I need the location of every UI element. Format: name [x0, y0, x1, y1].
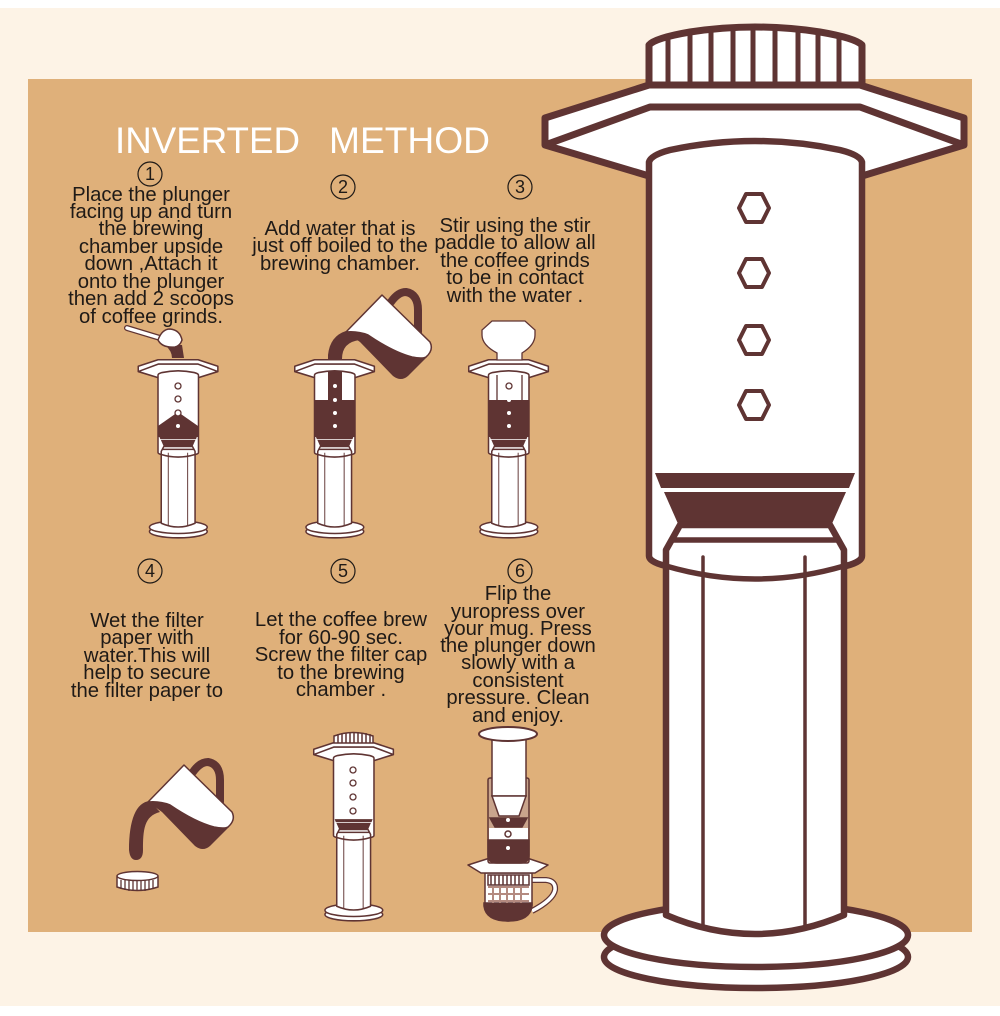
step 3 number: [508, 175, 532, 199]
step 6 text: pressure. Clean: [446, 687, 590, 709]
step 6 text: your mug. Press: [444, 618, 592, 640]
panel: tan background: [28, 79, 972, 932]
step 5 illustration: press with filter cap: [314, 732, 393, 921]
step 5 text: [255, 609, 427, 701]
step 2 text: [251, 218, 428, 275]
step 6 text: [440, 583, 596, 727]
brewing chamber: [649, 141, 862, 566]
step 4 text: [71, 610, 223, 702]
step 1 text: of coffee grinds.: [79, 306, 223, 328]
step 1 text: onto the plunger: [78, 271, 225, 293]
step 1 text: Place the plunger: [72, 184, 230, 206]
step 1 text: facing up and turn: [70, 201, 232, 223]
step 2 number: 2: [338, 177, 348, 197]
step 6 text: slowly with a: [461, 652, 576, 674]
title: [115, 120, 490, 161]
step 4 illustration: jug pouring on filter cap: [117, 762, 233, 891]
step 2 text: brewing chamber.: [260, 253, 420, 275]
step 3 number: 3: [515, 177, 525, 197]
step 3 text: Stir using the stir: [439, 215, 591, 237]
step 6 text: yuropress over: [451, 601, 585, 623]
hexagonal markers: [739, 194, 769, 419]
step 3 text: paddle to allow all: [434, 232, 596, 254]
step 6 text: consistent: [472, 670, 564, 692]
step 6 illustration: press flipped over mug: [468, 727, 555, 921]
step 2 illustration: water poured into press: [295, 292, 431, 538]
flange inner line: [545, 107, 964, 145]
step 3 text: with the water .: [446, 285, 583, 307]
step 2 text: just off boiled to the: [251, 235, 428, 257]
step 1 illustration: press with coffee grinds and scoop: [127, 328, 218, 538]
step 4 text: water.This will: [83, 645, 210, 667]
step 5 text: chamber .: [296, 679, 386, 701]
step 5 text: Let the coffee brew: [255, 609, 427, 631]
lower tube: [666, 525, 844, 934]
step 1 text: chamber upside: [79, 236, 223, 258]
title: INVERTED: [115, 120, 300, 161]
base: [604, 903, 908, 988]
step 4 number: 4: [145, 561, 155, 581]
step 1 text: [68, 184, 234, 328]
step 6 text: Flip the: [485, 583, 551, 605]
tube rods: [703, 557, 805, 926]
tube collar: [649, 540, 862, 579]
flange: [545, 85, 964, 176]
step 3 text: [434, 215, 596, 307]
step 3 text: the coffee grinds: [440, 250, 590, 272]
step 6 number: 6: [515, 561, 525, 581]
step 4 number: [138, 559, 162, 583]
step 5 number: [331, 559, 355, 583]
step 4 text: help to secure: [83, 662, 211, 684]
step 5 text: Screw the filter cap: [255, 644, 427, 666]
plunger cap: [649, 27, 862, 85]
step 1 text: then add 2 scoops: [68, 288, 234, 310]
step 1 number: [138, 162, 162, 186]
step 5 text: for 60-90 sec.: [279, 627, 403, 649]
step 4 text: paper with: [100, 627, 194, 649]
step 6 text: the plunger down: [440, 635, 596, 657]
step 4 text: Wet the filter: [90, 610, 204, 632]
step 2 text: Add water that is: [264, 218, 416, 240]
step 3 text: to be in contact: [446, 267, 584, 289]
step 1 text: down ,Attach it: [84, 253, 218, 275]
step 3 illustration: stir paddle in press: [469, 321, 548, 538]
step 6 number: [508, 559, 532, 583]
filter bands: [655, 473, 855, 526]
step 2 number: [331, 175, 355, 199]
step 1 text: the brewing: [99, 218, 203, 240]
title: METHOD: [329, 120, 490, 161]
step 5 text: to the brewing: [277, 662, 405, 684]
step 5 number: 5: [338, 561, 348, 581]
step 4 text: the filter paper to: [71, 680, 223, 702]
step 1 number: 1: [145, 164, 155, 184]
large press illustration: [545, 27, 964, 988]
step 6 text: and enjoy.: [472, 705, 564, 727]
